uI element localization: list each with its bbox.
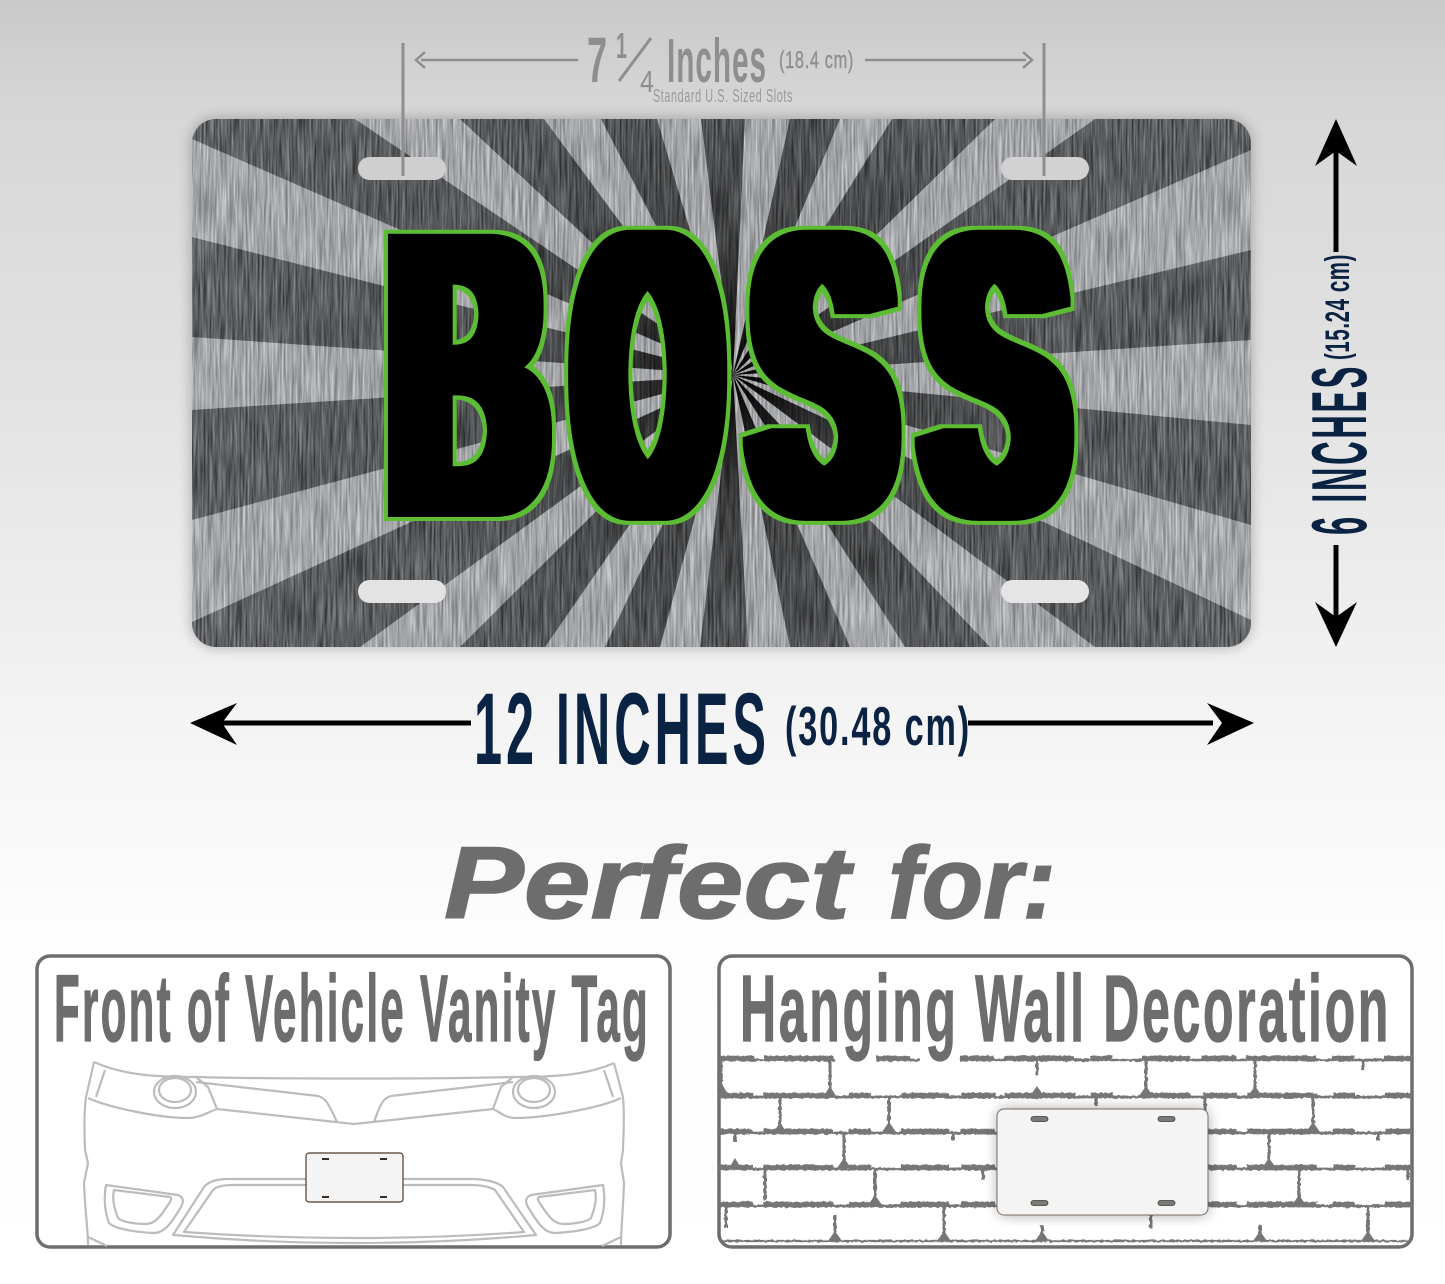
- height dimension: 6 inches: 6 INCHES: [1295, 364, 1383, 535]
- heading: Perfect for: Perfect: [444, 826, 855, 940]
- BOSS lettering: S: [754, 151, 893, 598]
- 7 1/4 Inches label: 1: [616, 25, 627, 66]
- panel: wall decoration: [719, 956, 1412, 1247]
- sunburst light rays: [192, 119, 1251, 647]
- 7 1/4 Inches label: 7: [587, 24, 607, 96]
- small plate on bumper: [306, 1153, 403, 1202]
- 7 1/4 Inches label: [587, 24, 854, 99]
- 7 1/4 Inches label: 4: [640, 64, 654, 99]
- heading: Perfect for: for:: [888, 826, 1056, 940]
- white plate on wall: [997, 1109, 1208, 1215]
- BOSS lettering: O: [578, 151, 718, 598]
- 7 1/4 Inches label: Inches: [667, 27, 767, 96]
- BOSS lettering: B: [391, 151, 545, 598]
- mounting slots: [358, 157, 1089, 603]
- width dimension: 12 inches: 12 INCHES: [474, 672, 770, 786]
- 30.48 cm label: (30.48 cm): [785, 695, 971, 757]
- 15.24 cm label: (15.24 cm): [1319, 254, 1357, 360]
- BOSS lettering: [391, 151, 1066, 598]
- text: Front of Vehicle Vanity Tag: [54, 956, 650, 1062]
- panel frame: [37, 956, 670, 1247]
- slot spacing dimension: [403, 24, 1044, 176]
- car front line drawing: [84, 1062, 624, 1246]
- 7 1/4 Inches label: (18.4 cm): [779, 47, 854, 74]
- standard slots note: Standard U.S. Sized Slots: [653, 86, 793, 106]
- plate drop shadow: [192, 119, 1251, 647]
- panel frame: [719, 956, 1412, 1247]
- slot guide lines: [403, 43, 1044, 176]
- panel: front of vehicle: [37, 956, 670, 1247]
- brick wall: [719, 1058, 1412, 1241]
- BOSS lettering: S: [926, 151, 1066, 598]
- height arrow: [1315, 119, 1357, 647]
- license plate: [192, 119, 1251, 647]
- width dimension: 12 inches: [190, 672, 1254, 786]
- width arrow: [190, 703, 1254, 745]
